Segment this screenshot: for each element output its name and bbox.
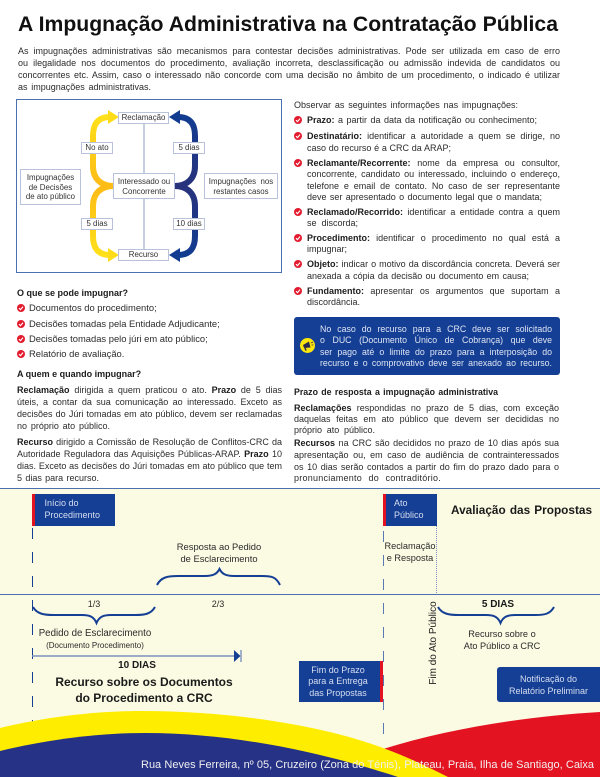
text block: Reclamação: Reclamação dirigida a quem praticou o ato. Prazo de 5 dias — [17, 385, 282, 395]
checklist: informações nas impugnações: caso do recurso é a CRC da ARAP; — [307, 143, 451, 153]
callout: DUC: recurso e o comprovativo deve ser anexado ao recurso. — [320, 358, 552, 368]
intro text block: As impugnações administrativas são mecanismos para contestar decisões administrativas. Pode ser utilizada em caso de erro — [18, 46, 560, 56]
checklist: informações nas impugnações: deve ser apresentado o documento legal que o mandata; — [307, 192, 542, 202]
label: No ato: No ato — [85, 143, 109, 152]
text block: Recursos: Recursos na CRC são decididos no prazo de 10 dias após sua — [294, 438, 559, 448]
label: Reclamação e Resposta: e Resposta — [387, 553, 433, 563]
label: Recurso sobre o Ato Público a CRC: Ato Público a CRC — [464, 641, 540, 651]
label: Impugnações de Decisões de ato público — [20, 169, 81, 205]
marker: Fim do Prazo: para a Entrega — [308, 676, 368, 686]
bottom wave shapes — [0, 711, 600, 777]
marker: Ato Público: Público — [394, 510, 424, 520]
heading: O que se pode impugnar?: O que se pode impugnar? — [17, 288, 128, 298]
marker: Ato Público: Ato — [394, 498, 408, 508]
label: Resposta ao Pedido de Esclarecimento — [177, 541, 261, 564]
label: 10 DIAS: 10 DIAS — [118, 660, 156, 671]
diagram node: Reclamação: Reclamação — [122, 113, 165, 122]
label: 5 dias left: 5 dias — [86, 219, 108, 228]
checklist: o que se pode impugnar — [17, 302, 220, 359]
checklist: informações nas impugnações: Prazo: a partir da data da notificação ou conhecimento; — [307, 115, 537, 125]
checklist: informações nas impugnações: telefone e email de contato. No caso de ser representante — [307, 181, 560, 191]
text block: Reclamações — [294, 403, 559, 435]
label: Reclamação e Resposta: Reclamação — [384, 541, 436, 551]
checklist: o que se pode impugnar: Decisões tomadas pelo júri em ato público; — [29, 332, 208, 344]
panel: flow diagram — [16, 99, 282, 273]
label: No ato — [81, 142, 113, 154]
text block: Reclamação — [17, 385, 282, 431]
label: Reclamação e Resposta — [384, 541, 436, 563]
label: 5 dias left — [81, 218, 113, 230]
marker: Início do Procedimento: Início do — [44, 498, 79, 508]
label: Fim do Ato Público (vertical): Fim do Ato Público — [428, 601, 439, 685]
label: Pedido de Esclarecimento: Pedido de Esclarecimento — [39, 628, 151, 639]
label: Pedido de Esclarecimento: (Documento Procedimento) — [46, 641, 144, 650]
marker: Início do Procedimento — [32, 494, 115, 526]
checklist: informações nas impugnações: se discorda; — [307, 218, 358, 228]
diagram node: Interessado ou Concorrente — [113, 173, 175, 199]
marker: Fim do Prazo — [299, 661, 383, 702]
callout: DUC: o DUC (Documento Único de Cobrança) que deve — [320, 335, 552, 345]
label: Pedido de Esclarecimento — [39, 628, 151, 650]
label: Recurso sobre o Ato Público a CRC — [464, 629, 540, 651]
label: Resposta ao Pedido de Esclarecimento: Resposta ao Pedido — [177, 541, 261, 552]
text block: Recurso: 5 dias para recurso. — [17, 473, 99, 483]
text block: Recursos — [294, 438, 559, 483]
label: Impugnações nos restantes casos: Impugnações nos — [209, 177, 273, 186]
callout: DUC: No caso do recurso para a CRC deve ser solicitado — [320, 324, 552, 334]
label: 5 dias right: 5 dias — [178, 143, 200, 152]
text block: Recurso — [17, 437, 282, 483]
checklist: informações nas impugnações: Fundamento: apresentar os argumentos que suportam a — [307, 286, 560, 296]
heading: Prazo de resposta: Prazo de resposta a impugnação administrativa — [294, 387, 498, 397]
text block: Reclamação: no próprio ato público. — [17, 421, 110, 431]
marker: Notificação do Relatório Preliminar — [497, 667, 600, 702]
checklist: informações nas impugnações: anexada a cópia da decisão ou documento em causa; — [307, 271, 529, 281]
diagram connectors and arrows — [90, 110, 198, 262]
label: 10 dias — [173, 218, 205, 230]
text block: Recursos: os 10 dias serão contados a partir do fim do prazo dado para o — [294, 462, 559, 472]
callout: DUC — [294, 317, 560, 375]
title: A Impugnação Administrativa na Contratação Pública — [18, 13, 558, 36]
label: 2/3: 2/3 — [212, 599, 224, 609]
label: 5 dias right — [173, 142, 205, 154]
checklist: informações nas impugnações: Destinatário: identificar a autoridade a quem se dirige, no — [307, 131, 560, 141]
text block: Recurso: dias. Exceto as decisões do Júri tomadas em ato público que tem — [17, 461, 282, 471]
callout: DUC: ser pago até o limite do prazo para a interposição do — [320, 347, 552, 357]
checklist: informações nas impugnações: discordância. — [307, 297, 360, 307]
label: Recurso sobre os Documentos do Procedimento a CRC: do Procedimento a CRC — [75, 690, 213, 704]
checklist: informações nas impugnações: Reclamado/Recorrido: identificar a entidade contra a quem — [307, 207, 560, 217]
diagram node: Interessado ou Concorrente: Interessado ou — [118, 177, 170, 186]
marker: Notificação do Relatório Preliminar: Relatório Preliminar — [509, 686, 588, 696]
label: Impugnações de Decisões de ato público: de Decisões — [29, 183, 72, 192]
intro text block: ou ilegalidade nos documentos do procedimento, avaliação incorreta, desclassificação ou admissão indevida de candidatos ou — [18, 58, 560, 68]
checklist: informações nas impugnações: impugnar; — [307, 244, 347, 254]
label: Recurso sobre o Ato Público a CRC: Recurso sobre o — [468, 629, 536, 639]
checklist: informações nas impugnações — [294, 115, 560, 307]
text block: Recursos: pronunciamento do contraditório. — [294, 473, 441, 483]
checklist: o que se pode impugnar: Decisões tomadas pela Entidade Adjudicante; — [29, 318, 220, 328]
diagram node: Reclamação — [118, 112, 169, 124]
checklist: o que se pode impugnar: Relatório de avaliação. — [29, 348, 124, 359]
icon: megaphone — [300, 338, 315, 353]
panel: timeline background — [0, 488, 600, 777]
timeline lines and braces — [0, 526, 600, 734]
text block: Recurso: Recurso dirigido a Comissão de Resolução de Conflitos-CRC da — [17, 437, 282, 447]
label: Recurso sobre os Documentos do Procedimento a CRC — [55, 675, 233, 704]
label: 1/3: 1/3 — [88, 599, 100, 609]
marker: Notificação do Relatório Preliminar: Notificação do — [520, 674, 577, 684]
label: Impugnações de Decisões de ato público: de ato público — [26, 192, 75, 201]
marker: Fim do Prazo: das Propostas — [309, 688, 367, 698]
label: 5 DIAS: 5 DIAS — [482, 599, 514, 610]
label: Resposta ao Pedido de Esclarecimento: de Esclarecimento — [180, 553, 258, 564]
heading: Avaliação das Propostas: Avaliação das Propostas — [451, 503, 592, 517]
text block: Reclamações: Reclamações respondidas no prazo de 5 dias, com exceção — [294, 403, 559, 413]
text block: Recursos: apresentação ou, em caso de audiência de contrainteressados — [294, 450, 559, 460]
checklist: informações nas impugnações: concorrente, candidato ou interessado, incluindo o endereço, — [307, 169, 560, 179]
marker: Início do Procedimento: Procedimento — [44, 510, 100, 520]
diagram node: Recurso: Recurso — [129, 250, 158, 259]
intro text block — [18, 46, 560, 92]
checklist: informações nas impugnações: Procedimento: identificar o procedimento no qual está a — [307, 233, 560, 243]
checklist: informações nas impugnações: Objeto: indicar o motivo da discordância concreta. Deverá ser — [307, 259, 560, 269]
marker: Fim do Prazo: Fim do Prazo — [311, 664, 365, 674]
label: 10 dias: 10 dias — [176, 219, 202, 228]
checklist: o que se pode impugnar: Documentos do procedimento; — [29, 302, 157, 313]
intro text block: as impugnações administrativas. — [18, 82, 151, 92]
diagram node: Interessado ou Concorrente: Concorrente — [122, 187, 166, 196]
text block: Reclamações: próprio ato público. — [294, 425, 375, 435]
diagram node: Recurso — [118, 249, 169, 261]
label: Impugnações nos restantes casos: restantes casos — [213, 187, 269, 196]
label: Recurso sobre os Documentos do Procedimento a CRC: Recurso sobre os Documentos — [55, 675, 233, 689]
checklist: informações nas impugnações: Reclamante/Recorrente: nome da empresa ou consultor, — [307, 158, 560, 168]
heading: A quem e quando impugnar?: A quem e quando impugnar? — [17, 369, 141, 379]
text block: Recurso: Autoridade Reguladora das Aquisições Públicas-ARAP. Prazo 10 — [17, 449, 282, 459]
heading: Observar as seguintes informações: Observar as seguintes informações nas impugnações: — [294, 100, 518, 110]
marker: Ato Público — [383, 494, 437, 526]
label: Impugnações nos restantes casos — [204, 173, 278, 199]
text block: Reclamações: daquelas feitas em ato público que devem ser decididas no — [294, 414, 559, 424]
text block: Reclamação: úteis, a contar da sua comunicação ao interessado. Exceto as — [17, 397, 282, 407]
footer address: Rua Neves Ferreira, nº 05, Cruzeiro (Zona do Ténis), Plateau, Praia, Ilha de Santiago, Caixa — [141, 759, 594, 771]
intro text block: concorrentes etc. Assim, caso o interessado não concorde com uma decisão no âmbito de um procedimento, o indicado é utilizar — [18, 70, 560, 80]
label: Impugnações de Decisões de ato público: Impugnações — [27, 173, 74, 182]
text block: Reclamação: decisões do Júri tomadas em ato público, devem ser reclamadas — [17, 409, 282, 419]
